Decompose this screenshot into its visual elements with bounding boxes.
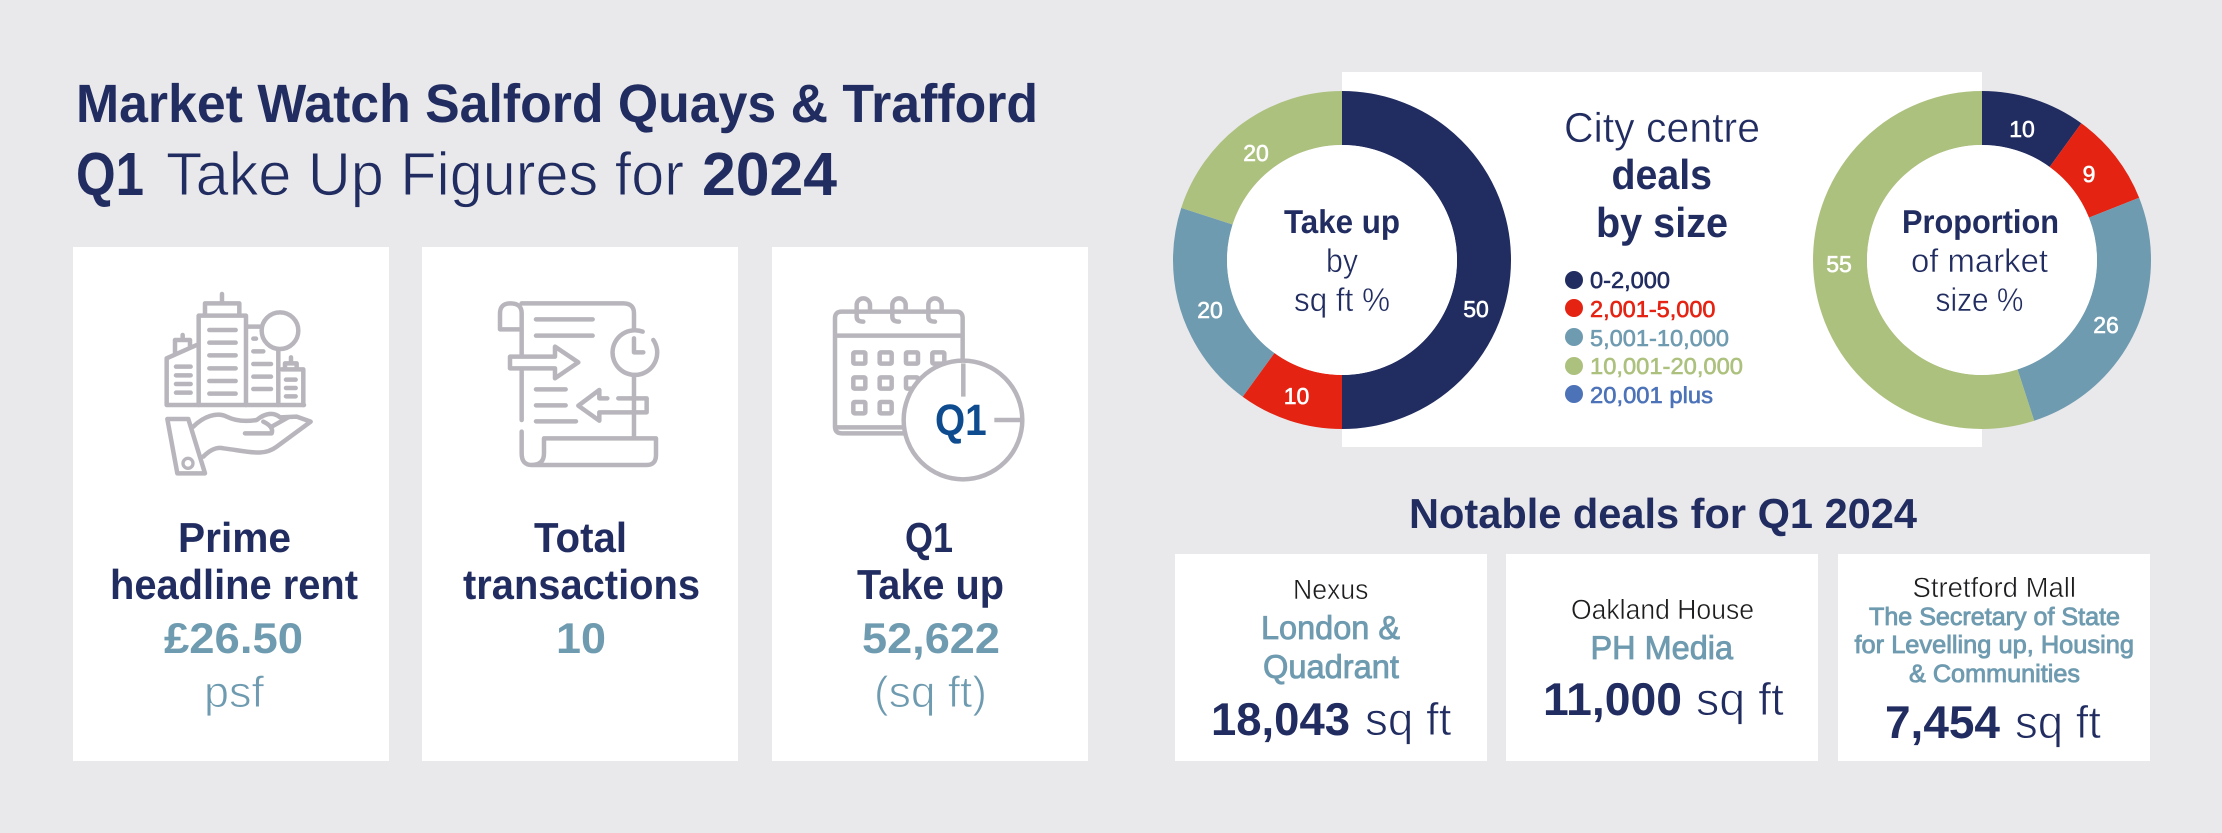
panel: deal Oakland House: sq ft (1696, 673, 1784, 725)
donut chart: take up by sq ft: 20 (1197, 297, 1223, 323)
value: £26.50 psf: psf (204, 668, 265, 717)
panel: deal Nexus: London & (1261, 609, 1400, 646)
panel: deal Oakland House: Oakland House (1571, 594, 1754, 625)
legend: 5,001-10,000 (1590, 325, 1729, 351)
panel: deal Oakland House: PH Media (1590, 629, 1734, 666)
value: 10: 10 (556, 615, 606, 663)
label: total transactions: transactions (463, 561, 700, 608)
donut chart: take up by sq ft: 20 (1243, 140, 1269, 166)
title: Market Watch Salford Quays & Trafford (76, 74, 1038, 134)
value: 52,622 sq ft: (sq ft) (874, 668, 987, 717)
title: Take Up Figures for (166, 140, 684, 208)
heading: city centre deals by size: City centre (1564, 104, 1760, 151)
heading: notable deals: Notable deals for Q1 2024 (1409, 490, 1918, 537)
legend: 10,001-20,000 (1590, 353, 1743, 379)
donut chart: proportion of market size: Proportion (1902, 203, 2059, 240)
label: prime headline rent: Prime (178, 514, 291, 561)
donut chart: take up by sq ft: sq ft % (1294, 281, 1390, 318)
legend: 0-2,000 (1590, 267, 1670, 293)
panel: deal Nexus (1175, 554, 1487, 761)
legend: 20,001 plus (1590, 382, 1713, 408)
value: 52,622 sq ft: 52,622 (862, 615, 1000, 663)
donut chart: proportion of market size: 26 (2093, 312, 2119, 338)
title: Q1 (76, 140, 144, 208)
panel: city centre deals by size (1197, 72, 2124, 447)
donut chart: proportion of market size (1826, 116, 2124, 402)
donut chart: proportion of market size: 55 (1826, 251, 1852, 277)
title: 2024 (702, 140, 837, 208)
label: prime headline rent (110, 514, 358, 608)
panel: prime headline rent (73, 247, 389, 761)
value: 52,622 sq ft (862, 615, 1000, 717)
label: total transactions (463, 514, 700, 608)
heading: city centre deals by size: by size (1596, 199, 1728, 246)
panel: deal Stretford Mall: 7,454 (1885, 696, 2000, 748)
panel: deal Stretford Mall (1838, 554, 2150, 761)
heading: city centre deals by size (1564, 104, 1760, 246)
legend: 2,001-5,000 (1590, 296, 1716, 322)
label: total transactions: Total (534, 514, 627, 561)
donut chart: take up by sq ft: 10 (1284, 383, 1309, 409)
label: Q1 take up (857, 514, 1004, 608)
icon: city in hand (167, 294, 311, 473)
legend (1565, 267, 1743, 408)
panel: deal Nexus: sq ft (1365, 693, 1452, 745)
panel: deal Stretford Mall: sq ft (2015, 696, 2101, 748)
panel: deal Oakland House (1506, 554, 1818, 761)
panel: Q1 take up (772, 247, 1088, 761)
donut chart: take up by sq ft (1197, 118, 1489, 409)
icon: calendar with Q1 badge (835, 298, 1022, 479)
donut chart: proportion of market size: 10 (2009, 116, 2035, 142)
donut chart: proportion of market size: size % (1936, 281, 2024, 318)
icon: calendar with Q1 badge: Q1 (935, 395, 987, 444)
panel: deal Oakland House: 11,000 (1543, 673, 1682, 725)
donut chart: proportion of market size: 9 (2083, 161, 2095, 187)
panel: deal Stretford Mall: The Secretary of State (1869, 603, 2120, 631)
panel: deal Stretford Mall: Stretford Mall (1912, 572, 2076, 603)
label: Q1 take up: Q1 (905, 514, 953, 561)
panel: deal Stretford Mall: & Communities (1909, 660, 2080, 688)
panel: deal Stretford Mall: for Levelling up, Housing (1854, 631, 2134, 659)
label: prime headline rent: headline rent (110, 561, 358, 608)
heading: city centre deals by size: deals (1612, 151, 1712, 198)
value: £26.50 psf: £26.50 (164, 615, 303, 663)
icon: scroll with arrows and clock (500, 303, 657, 465)
donut chart: take up by sq ft: Take up (1284, 203, 1400, 240)
panel: deal Nexus: 18,043 (1211, 693, 1350, 745)
value: £26.50 psf (164, 615, 303, 717)
title (76, 74, 1038, 208)
panel: deal Nexus: Quadrant (1263, 648, 1399, 685)
panel: total transactions (422, 247, 738, 761)
label: Q1 take up: Take up (857, 561, 1004, 608)
panel: deal Nexus: Nexus (1293, 574, 1368, 605)
donut chart: take up by sq ft: 50 (1463, 296, 1489, 322)
donut chart: take up by sq ft: by (1326, 242, 1358, 279)
donut chart: proportion of market size: of market (1911, 242, 2048, 279)
